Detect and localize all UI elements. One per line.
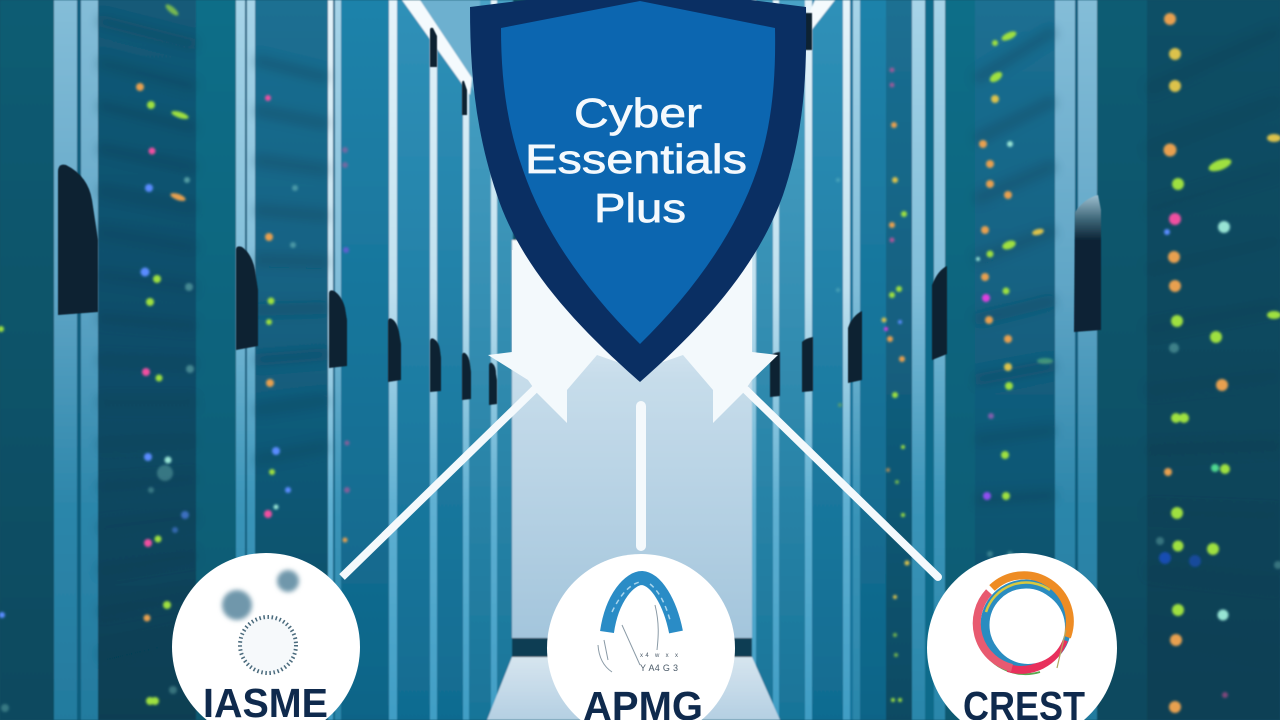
starburst glow behind shield — [488, 250, 778, 423]
badge: CREST — [927, 553, 1117, 720]
rack door handles — [58, 13, 1101, 405]
icon: APMG emblem — [598, 578, 678, 673]
connector arrow: APMG to shield — [636, 406, 646, 546]
shield outer border — [470, 0, 806, 382]
floor — [487, 657, 780, 720]
shield: Cyber Essentials Plus — [470, 0, 806, 382]
right server racks — [750, 0, 1280, 720]
icon: IASME emblem — [222, 570, 299, 673]
ceiling and rack-top light strips — [402, 0, 835, 100]
icon: CREST rainbow ring — [977, 575, 1070, 674]
shield inner face — [501, 1, 775, 344]
skirting strip — [512, 638, 752, 658]
shield title: Cyber — [574, 90, 702, 136]
left server racks — [0, 0, 513, 720]
shield title: Essentials — [525, 136, 747, 182]
icon: APMG emblem: x4 w x x — [640, 653, 678, 659]
back wall — [512, 240, 752, 640]
connector arrow: CREST to shield — [746, 390, 938, 577]
shield title: Plus — [594, 185, 686, 231]
badge: APMG — [547, 554, 735, 720]
shield title — [525, 90, 747, 231]
badge: IASME — [172, 553, 360, 720]
icon: APMG emblem: Y A4 G 3 — [640, 663, 678, 673]
connector arrow: IASME to shield — [342, 388, 536, 577]
